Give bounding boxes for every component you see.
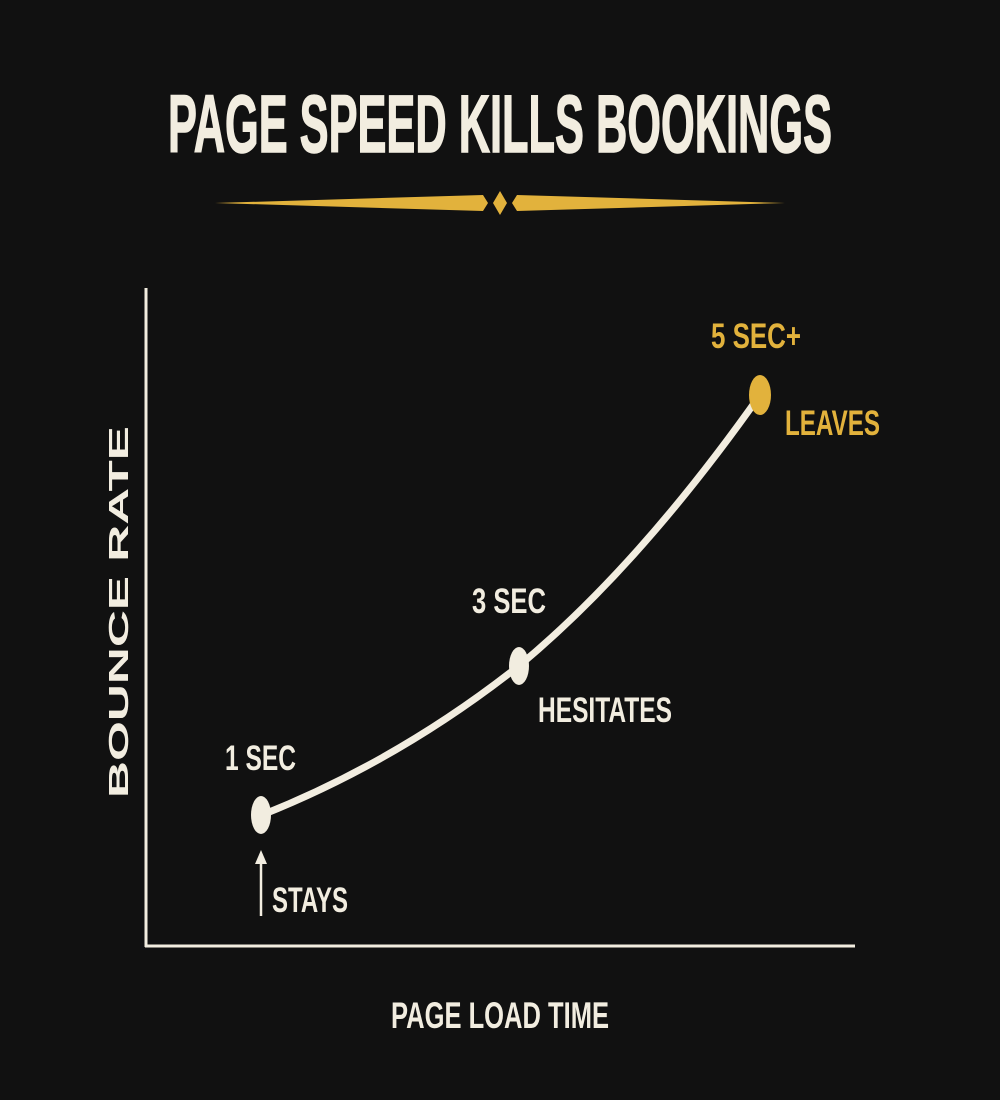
label: stays with arrow: STAYS	[272, 881, 348, 920]
label: stays with arrow	[255, 850, 348, 920]
point: 5 sec+: 5 SEC+	[711, 317, 801, 356]
chart axes	[145, 288, 855, 947]
x axis label: PAGE LOAD TIME	[391, 995, 609, 1036]
point: 5 sec+: LEAVES	[785, 404, 880, 443]
point: 3 sec: 3 SEC	[472, 582, 546, 621]
point: 3 sec	[472, 582, 672, 730]
point: 5 sec+	[711, 317, 880, 443]
divider ornament	[215, 191, 785, 215]
curve	[262, 395, 760, 815]
point: 1 sec	[225, 739, 296, 834]
point: 1 sec: 1 SEC	[225, 739, 296, 778]
y axis label: BOUNCE RATE	[103, 426, 134, 798]
point: 3 sec: HESITATES	[538, 691, 672, 730]
